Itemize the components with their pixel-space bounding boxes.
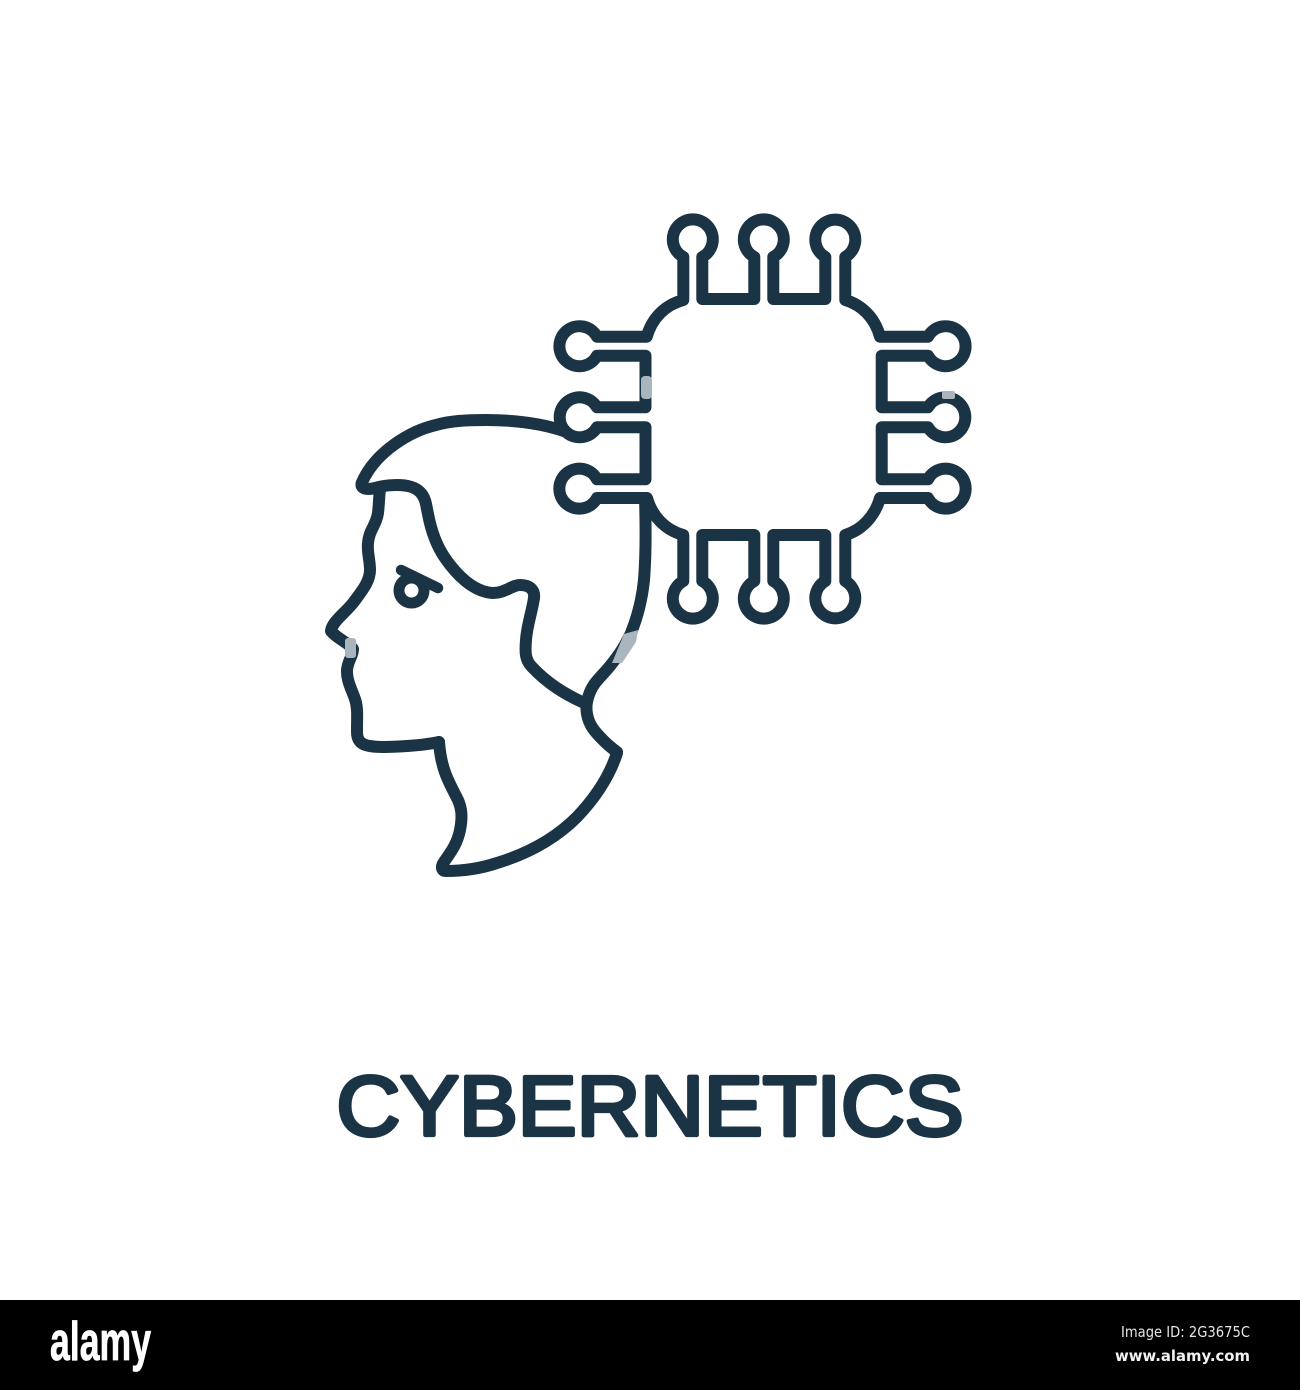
title: CYBERNETICS [336, 1059, 963, 1153]
footer background [0, 1300, 1300, 1390]
watermark: back of hair [612, 630, 638, 663]
hair back and neck line [586, 498, 646, 752]
eyebrow [401, 570, 438, 588]
logo: alamy [50, 1310, 151, 1372]
eye ring [399, 578, 424, 603]
watermark: chip right [942, 391, 955, 399]
watermark traces over the icon strokes [345, 376, 955, 663]
icon: human head profile [331, 420, 646, 871]
icon: eye [399, 570, 438, 603]
face profile [331, 489, 439, 747]
icon: microchip with twelve pins [559, 219, 966, 619]
footer bar [0, 1300, 1300, 1390]
watermark: chip left [641, 376, 652, 399]
hair top outline [361, 420, 582, 702]
watermark: nose [345, 638, 356, 658]
icon: head with microchip [331, 219, 966, 871]
image id: Image ID: 2G3675C [1121, 1323, 1250, 1341]
shoulder curve [439, 742, 617, 871]
website: www.alamy.com [1115, 1347, 1250, 1365]
